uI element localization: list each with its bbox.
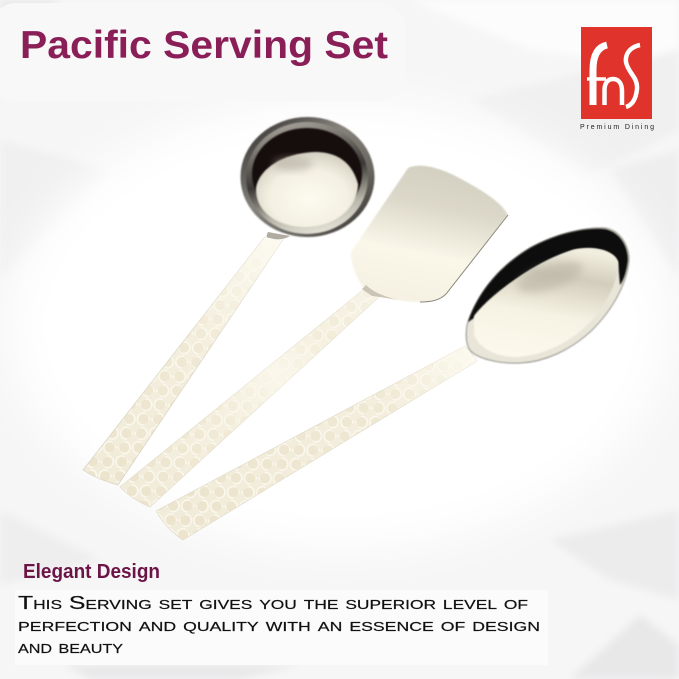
logo monogram fnS — [587, 45, 640, 107]
serving spoon shadow — [514, 255, 586, 299]
ladle shadow on bowl — [273, 157, 313, 171]
title panel — [0, 3, 405, 101]
ladle bowl surface — [256, 152, 358, 227]
description text — [18, 592, 540, 657]
title: Pacific Serving Set — [20, 24, 388, 67]
logo red square — [581, 27, 652, 119]
ladle handle — [83, 234, 284, 485]
spoon: ladle — [83, 117, 374, 485]
spoon: serving spoon — [156, 228, 629, 540]
logo — [580, 27, 654, 131]
spatula edge — [420, 215, 508, 302]
spatula neck — [362, 285, 398, 300]
description panel — [15, 590, 548, 665]
ladle bowl rim — [240, 117, 374, 237]
serving spoon bowl surface — [474, 248, 618, 357]
serving spoon outer bowl — [466, 228, 629, 363]
spatula handle — [120, 289, 380, 507]
description line 2: perfection and quality with an essence of design — [18, 614, 540, 635]
spoon: spatula — [120, 166, 508, 507]
ladle neck — [267, 232, 290, 239]
ladle inner dark crescent — [252, 128, 362, 220]
white central glow — [10, 100, 670, 550]
heading: Elegant Design: Elegant Design — [23, 561, 160, 583]
spatula head — [351, 166, 508, 302]
logo tagline: Premium Dining — [580, 124, 654, 131]
description line 1: This Serving set gives you the superior level of — [18, 592, 528, 613]
serving spoon handle — [156, 346, 477, 540]
description line 3: and beauty — [18, 636, 123, 657]
serving spoon dark crescent — [468, 229, 628, 322]
ladle inner rim — [246, 122, 368, 234]
